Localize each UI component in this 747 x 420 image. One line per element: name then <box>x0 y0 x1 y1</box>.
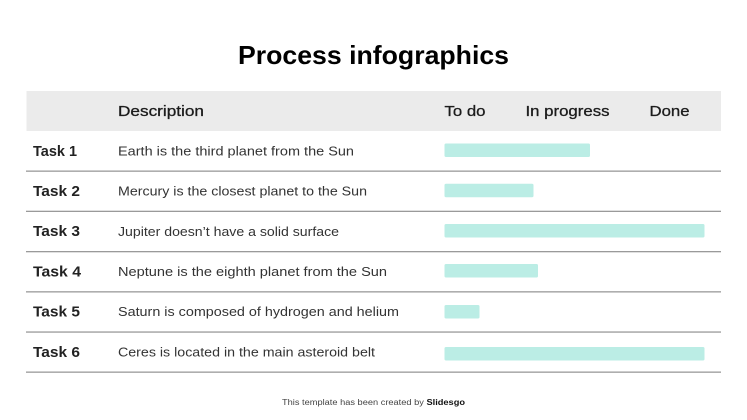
table header: In progress <box>526 103 610 120</box>
table header: To do <box>444 103 486 120</box>
row: task 2 <box>26 183 721 212</box>
table header: Done <box>650 103 690 120</box>
row: task 4: Neptune is the eighth planet from the Sun <box>118 264 387 279</box>
table header <box>26 91 721 131</box>
row: task 6 <box>26 344 721 373</box>
row: task 1: Earth is the third planet from the Sun <box>118 144 354 158</box>
row: task 3: Jupiter doesn’t have a solid surface <box>118 224 339 239</box>
row: task 5: Task 5 <box>33 304 80 320</box>
title: Process infographics <box>238 40 509 70</box>
row: task 2: Task 2 <box>33 183 80 200</box>
row: task 1: Task 1 <box>33 143 77 160</box>
row: task 1 <box>26 143 721 172</box>
row: task 4 <box>26 264 721 292</box>
row: task 5 <box>26 304 721 333</box>
row: task 3: Task 3 <box>33 223 80 240</box>
row: task 2: Mercury is the closest planet to the Sun <box>118 184 367 198</box>
row: task 3 <box>26 223 721 252</box>
row: task 6: Task 6 <box>33 344 80 361</box>
row: task 5: Saturn is composed of hydrogen and helium <box>118 304 399 319</box>
footer credit: This template has been created by Slidesgo <box>282 398 465 407</box>
table header: Description <box>118 103 204 120</box>
row: task 4: Task 4 <box>33 264 82 280</box>
row: task 6: Ceres is located in the main asteroid belt <box>118 344 375 360</box>
